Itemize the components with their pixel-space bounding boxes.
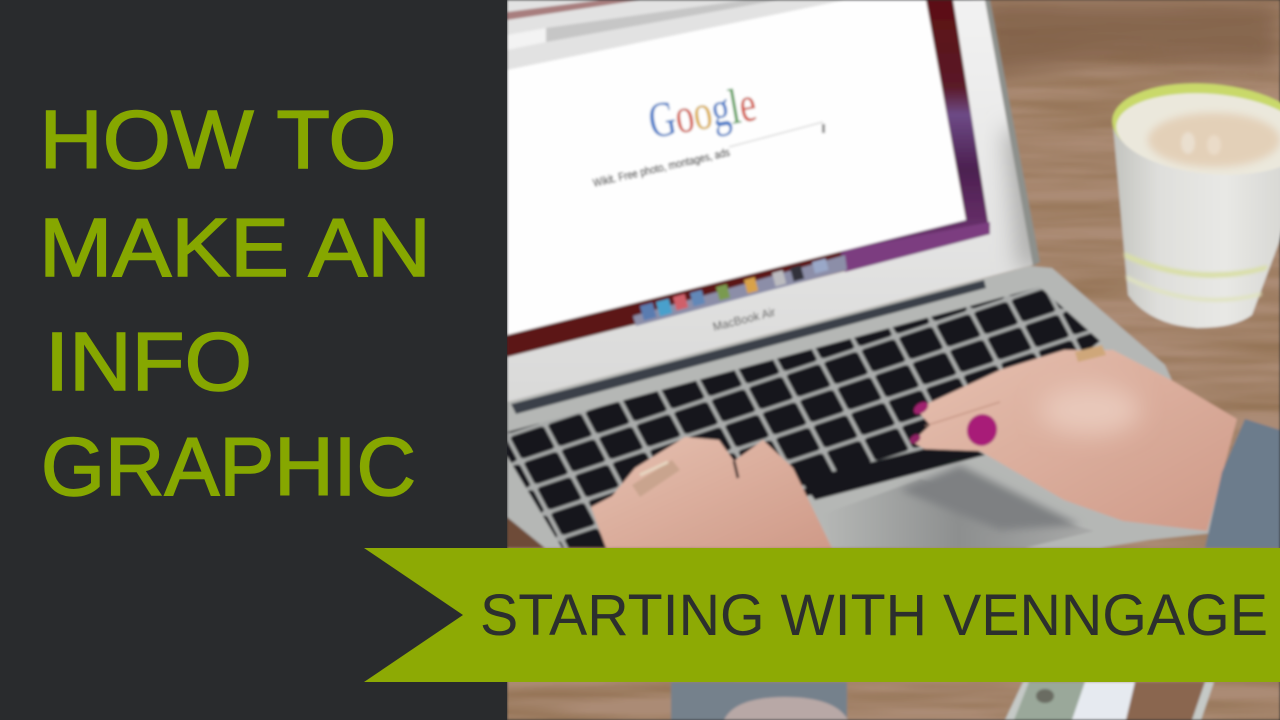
browser tab light (507, 28, 546, 50)
lid soft shadow (1005, 130, 1045, 270)
title line 1: HOW TO (40, 93, 396, 186)
lower sleeve (671, 682, 847, 720)
photo: laptop on wooden desk (507, 0, 1280, 720)
spacebar (803, 448, 986, 501)
panel: dark left background (0, 0, 507, 720)
search query text: Wikit. Free photo, montages, ads (592, 147, 731, 190)
right hand (908, 345, 1237, 531)
search box (729, 122, 823, 147)
title line 2: MAKE AN (39, 201, 431, 294)
speaker strip (511, 280, 986, 414)
browser address bar (546, 0, 778, 42)
MacBook Air label: MacBook Air (711, 305, 777, 334)
browser toolbar (507, 0, 845, 70)
trackpad shadow (900, 465, 1080, 530)
smartphone (1005, 682, 1214, 720)
laptop base (507, 266, 1240, 548)
title line 4: GRAPHIC (41, 420, 416, 513)
screen frame (507, 0, 990, 357)
white browser window (507, 0, 966, 335)
dock wallpaper strip (846, 221, 992, 262)
trackpad (850, 480, 1090, 548)
search box icon (822, 124, 825, 133)
banner ribbon (364, 548, 1280, 682)
coffee cup (1109, 76, 1280, 328)
wooden desk (507, 0, 1280, 720)
left hand (591, 437, 832, 548)
browser tabs (507, 0, 640, 20)
keyboard (507, 287, 1100, 548)
right sleeve (1205, 419, 1280, 548)
purple wallpaper edge (840, 0, 990, 272)
title: how to make an infographic (39, 93, 431, 513)
dock icons (633, 255, 847, 326)
lower hand (724, 697, 848, 720)
lid shadow edge (985, 0, 1040, 266)
title line 3: INFO (45, 315, 252, 408)
Google logo: Google (644, 75, 760, 149)
banner text: STARTING WITH VENNGAGE (480, 583, 1268, 648)
laptop lid (507, 0, 1033, 402)
